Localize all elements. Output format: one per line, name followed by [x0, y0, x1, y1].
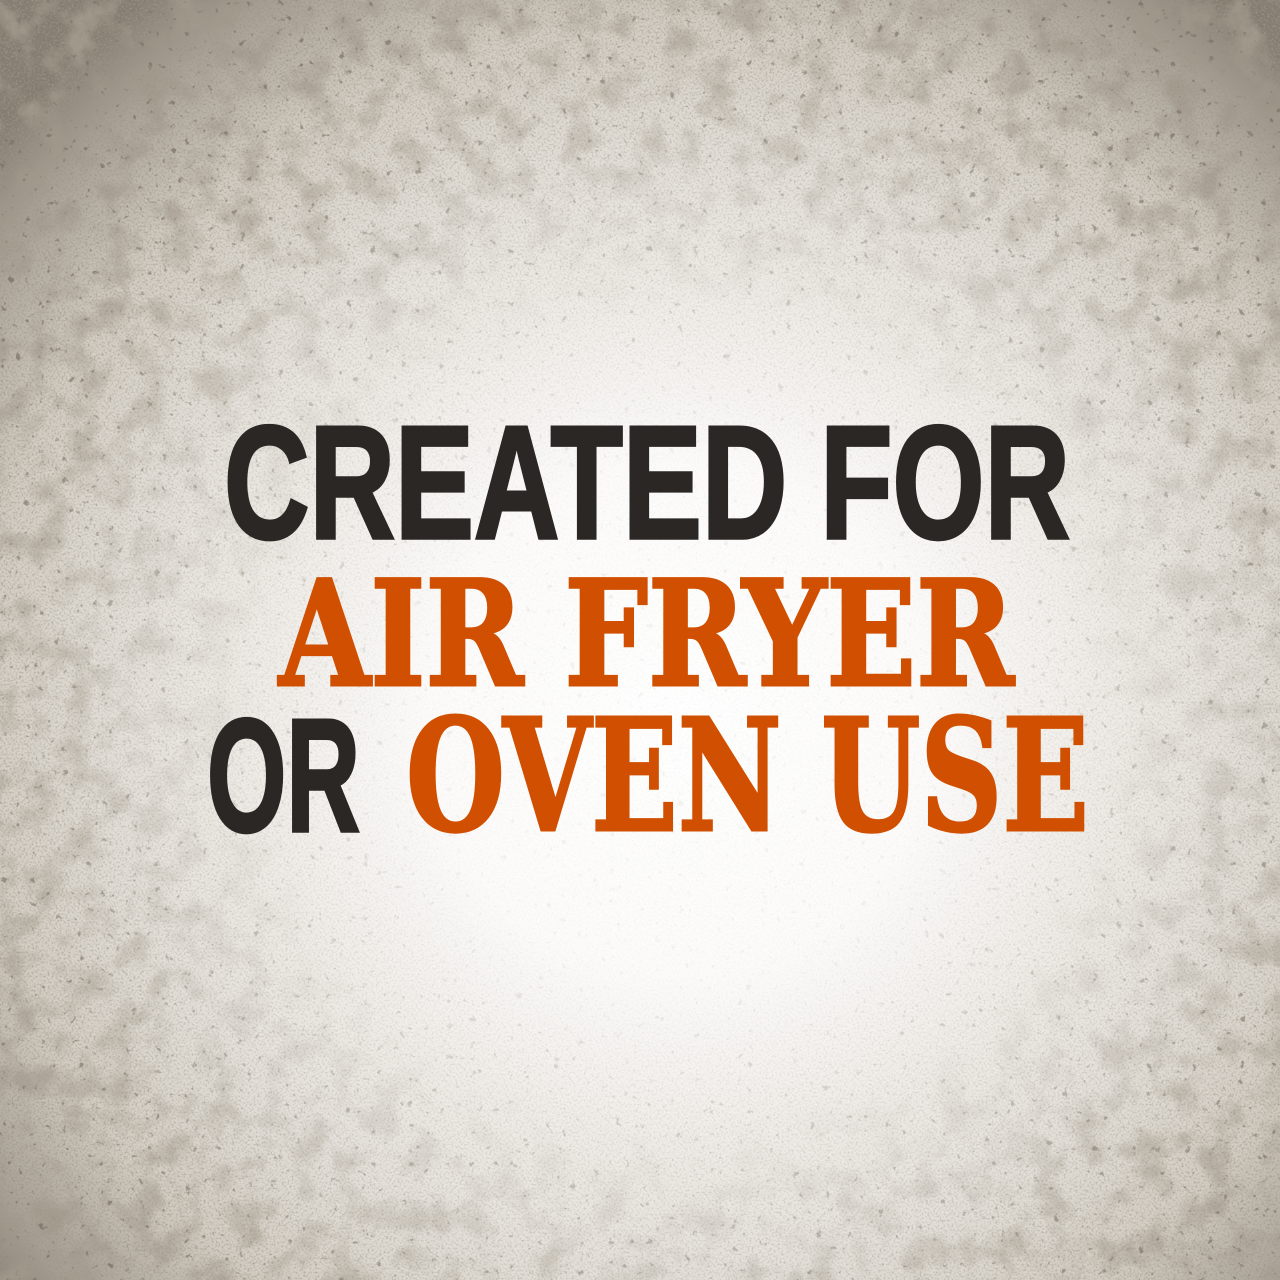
headline line 2: AIR FRYER — [277, 549, 1015, 720]
headline line 3: or: OR — [207, 686, 360, 866]
title: Created for air fryer or oven use — [207, 393, 1089, 867]
